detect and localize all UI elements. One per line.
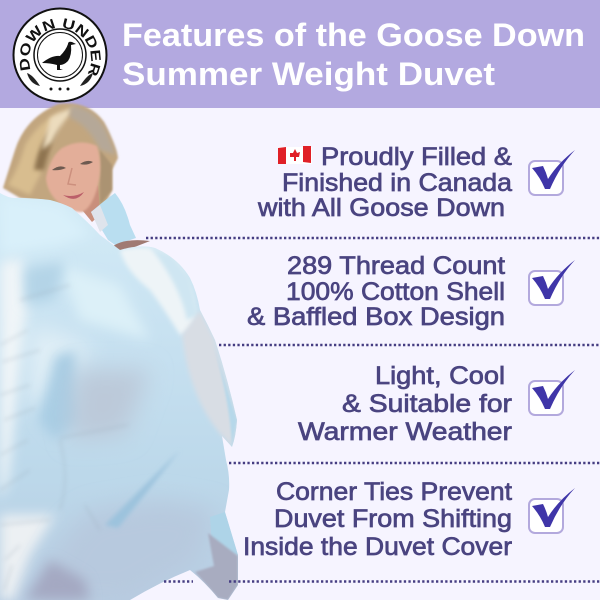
hair (3, 103, 118, 215)
shaded areas (25, 262, 65, 305)
arm roll (120, 247, 195, 335)
header band (0, 0, 600, 108)
title: Summer Weight Duvet (122, 56, 495, 92)
feature 4 text (243, 478, 512, 561)
icon: checkbox 2 (529, 260, 575, 305)
feature 1 text: with All Goose Down (257, 194, 505, 222)
photo: woman wrapped in duvet (0, 103, 240, 600)
feature 4 text: Inside the Duvet Cover (243, 533, 512, 561)
face (46, 142, 100, 212)
feature 3 text: & Suitable for (342, 390, 512, 418)
lit areas (5, 198, 71, 247)
duvet body (0, 190, 240, 600)
icon: checkbox 4 (529, 488, 575, 533)
wrinkles (4, 334, 34, 581)
title (122, 17, 585, 92)
feature 4 text: Duvet From Shifting (274, 505, 512, 533)
feature 2 text: 289 Thread Count (287, 252, 505, 280)
feature 1 text: Finished in Canada (282, 169, 512, 197)
title: Features of the Goose Down (122, 17, 585, 53)
feature 2 text: & Baffled Box Design (247, 303, 505, 331)
feature 3 text: Light, Cool (375, 362, 505, 390)
feature 4 text: Corner Ties Prevent (276, 478, 512, 506)
feature 2 text (247, 252, 505, 331)
logo: Down Under goose badge (12, 8, 108, 102)
corner fold (210, 512, 238, 555)
feature 3 text (298, 362, 512, 446)
feature 2 text: 100% Cotton Shell (286, 278, 505, 306)
raised duvet fold at the shoulder (91, 193, 136, 245)
neck (78, 185, 100, 222)
feature 1 text: Proudly Filled & (321, 143, 512, 171)
feature 1 text (257, 143, 512, 222)
icon: checkbox 1 (529, 150, 575, 195)
icon: Canadian flag (278, 146, 312, 164)
icon: checkbox 3 (529, 370, 575, 415)
feature 3 text: Warmer Weather (298, 418, 512, 446)
arm (113, 240, 150, 252)
logo: Down Under goose badge: DOWN UNDER (20, 18, 101, 76)
